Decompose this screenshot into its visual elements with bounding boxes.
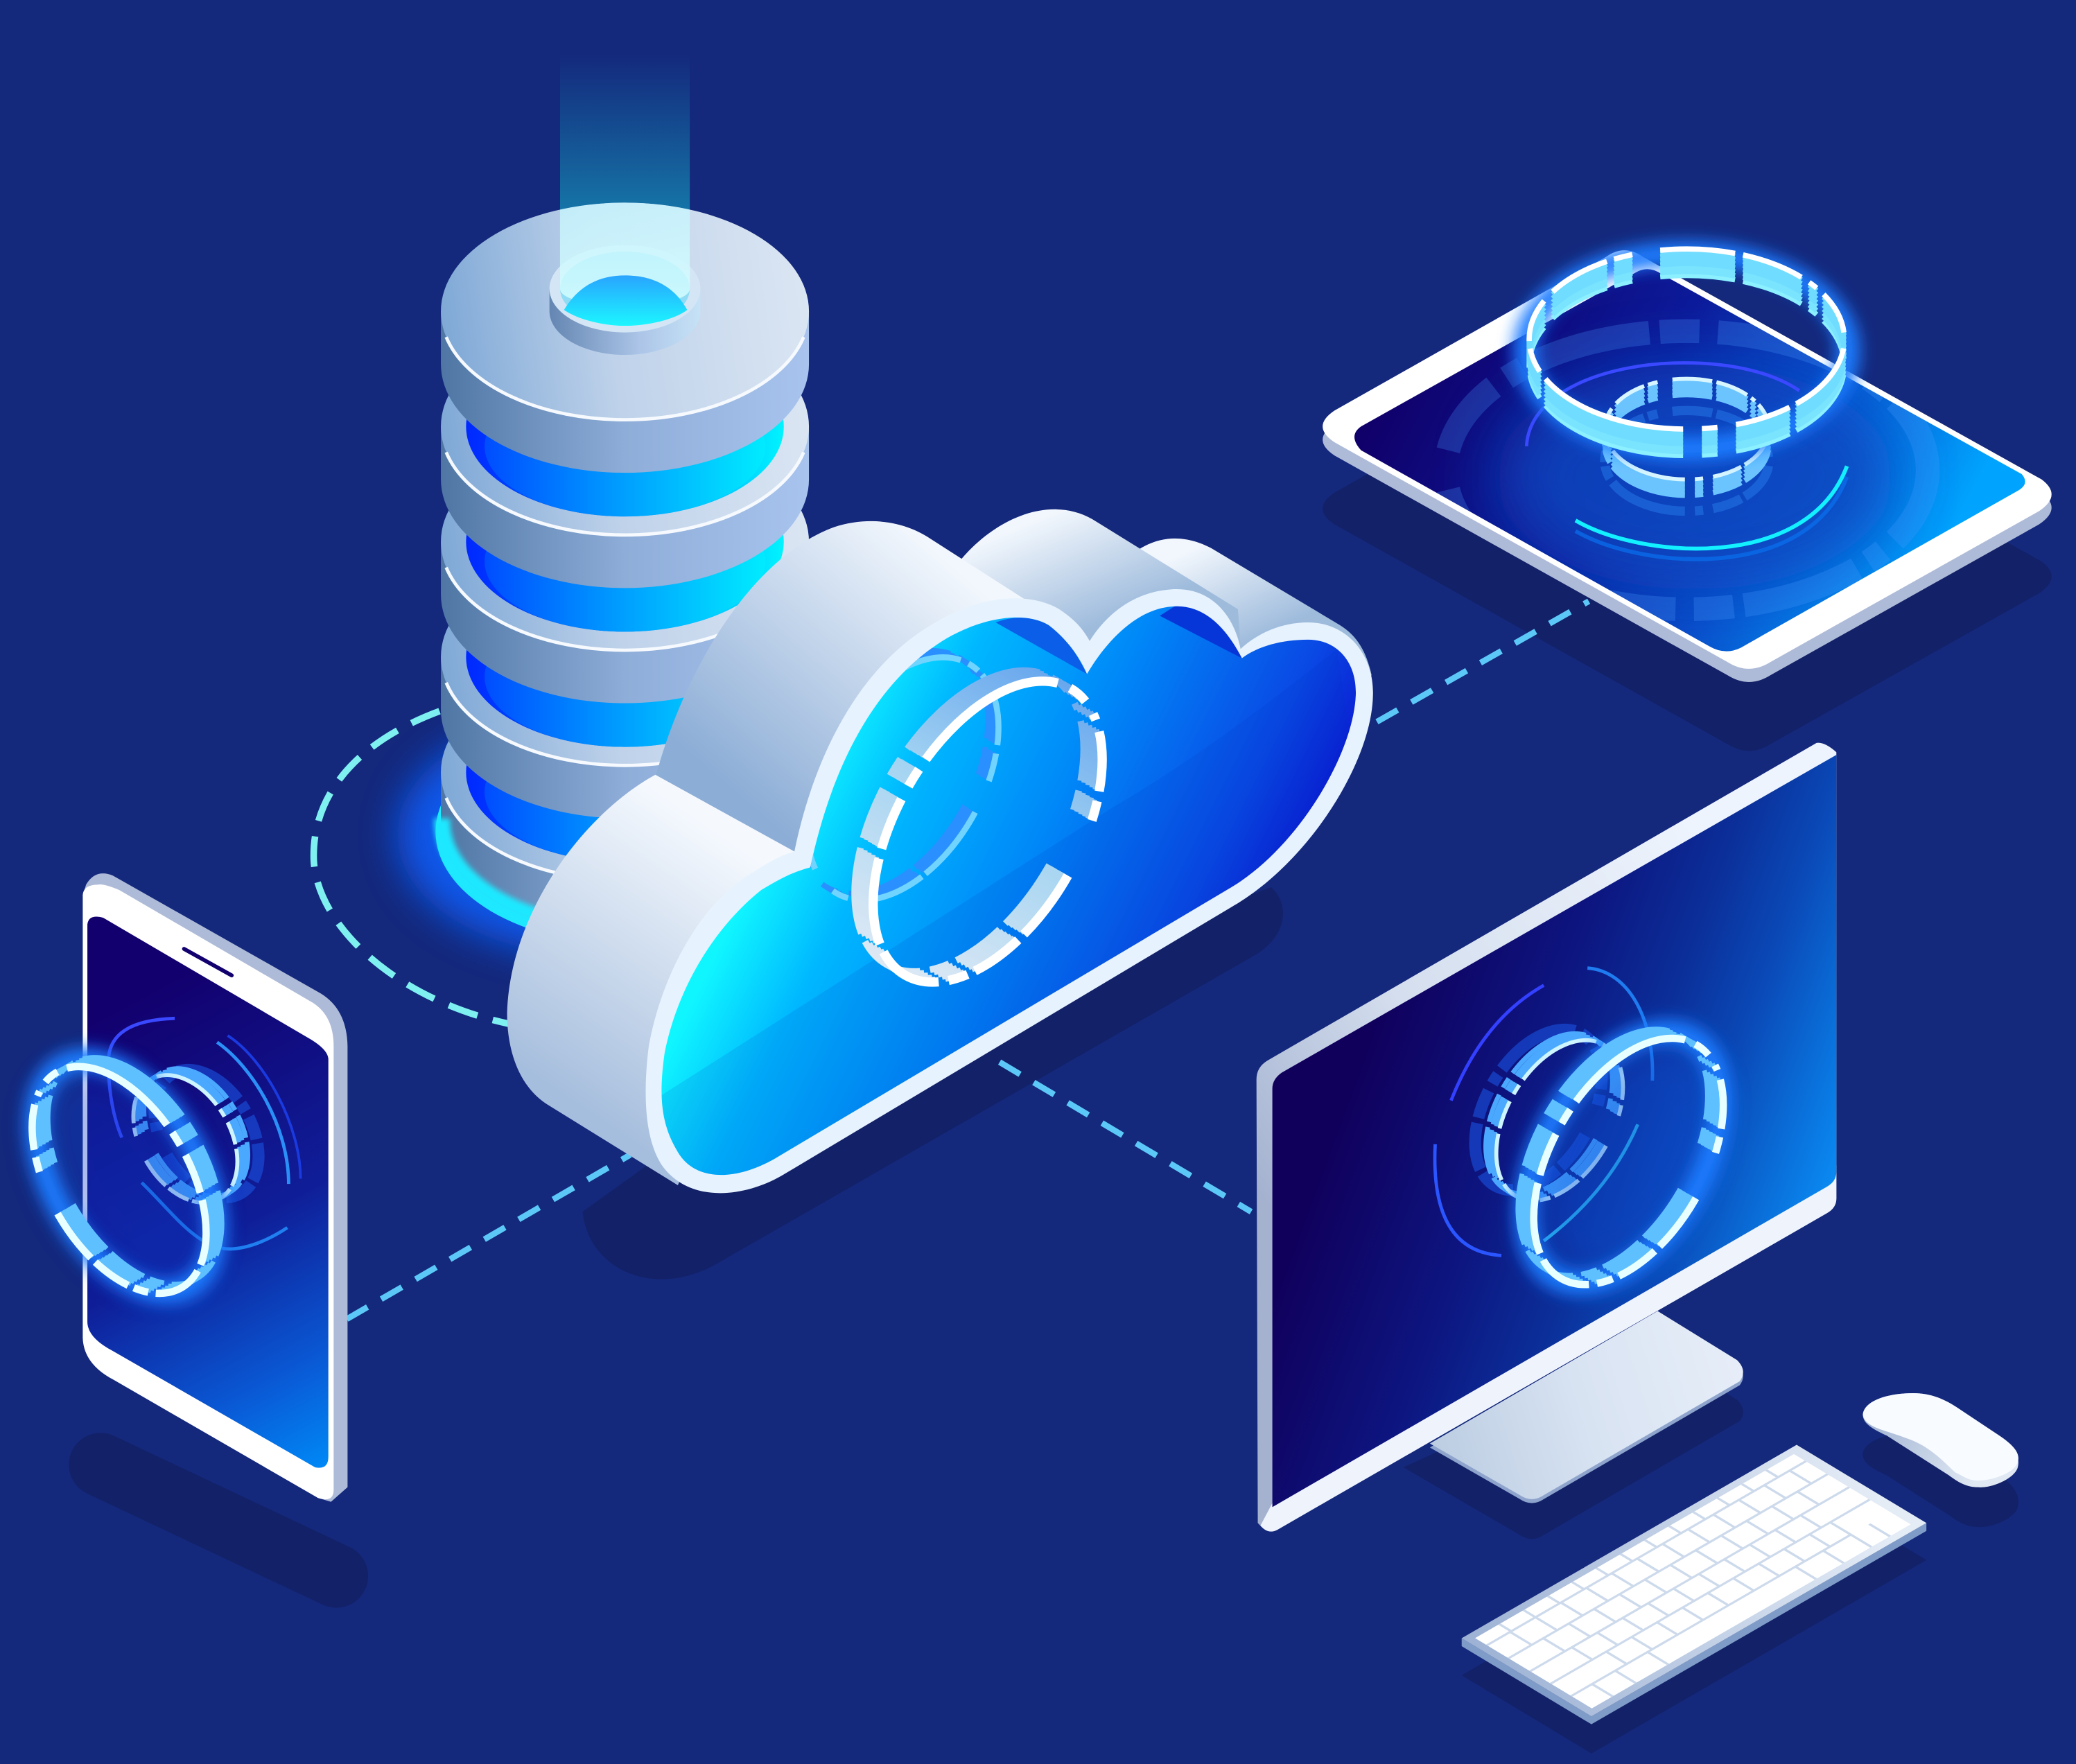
tablet side bbox=[1323, 263, 2052, 682]
database glow base bbox=[397, 713, 814, 956]
tablet small ring bbox=[1605, 378, 1769, 512]
top cap socket bbox=[550, 245, 700, 355]
monitor front ring bbox=[1479, 997, 1763, 1317]
shadow: phone bbox=[101, 1465, 336, 1576]
cloud bbox=[507, 509, 1377, 1219]
shadow: keyboard bbox=[1462, 1482, 1926, 1754]
shadow: mouse bbox=[1863, 1433, 2018, 1527]
tablet large ring bbox=[1529, 249, 1844, 455]
monitor back ring bbox=[1449, 1008, 1649, 1223]
monitor frame bbox=[1257, 743, 1836, 1531]
disc 2 bbox=[441, 318, 809, 588]
phone speaker bbox=[184, 949, 232, 975]
tablet ring glow bbox=[1525, 253, 1848, 449]
monitor bbox=[1257, 743, 1836, 1532]
dashed connector: cloud to phone bbox=[347, 1155, 630, 1319]
keyboard bbox=[1462, 1445, 1926, 1724]
light beam above disc bbox=[560, 53, 690, 225]
keyboard body bbox=[1462, 1445, 1926, 1716]
dashed orbit around database bbox=[314, 711, 508, 1024]
phone body bbox=[82, 884, 333, 1499]
phone screen bbox=[87, 917, 329, 1468]
cloud front face bbox=[661, 606, 1356, 1176]
disc 4 bbox=[441, 548, 809, 819]
tablet screen glow bbox=[1446, 331, 1928, 609]
monitor bottom bezel bbox=[1260, 1165, 1836, 1532]
cloud lobe far right bbox=[1139, 539, 1372, 689]
mouse side bbox=[1863, 1393, 2018, 1487]
shadow: monitor stand bbox=[1404, 1351, 1743, 1539]
cloud front ring bbox=[808, 632, 1149, 1021]
monitor stand bbox=[1430, 1311, 1743, 1503]
cloud lobe third bbox=[953, 509, 1242, 662]
phone bbox=[0, 873, 347, 1502]
shadow: cloud bbox=[582, 887, 1283, 1279]
mouse bbox=[1863, 1393, 2018, 1487]
database cylinder bbox=[441, 53, 809, 934]
shadow: tablet bbox=[1323, 333, 2052, 751]
phone back ring bbox=[112, 1050, 280, 1221]
phone ring glow bbox=[0, 1029, 252, 1322]
tablet screen bbox=[1354, 269, 2025, 652]
cloud back ring bbox=[810, 648, 1002, 901]
cloud lobe first bbox=[507, 775, 821, 1185]
tablet arcs bbox=[1526, 363, 1847, 559]
keyboard keys bbox=[1475, 1454, 1910, 1709]
phone front ring bbox=[0, 1028, 258, 1323]
disc 3 bbox=[441, 433, 809, 704]
disc 5 bbox=[441, 663, 809, 934]
monitor ring glow bbox=[1485, 999, 1761, 1316]
tablet bbox=[1323, 249, 2052, 682]
disc 1 top bbox=[441, 202, 809, 473]
monitor arcs bbox=[1435, 968, 1652, 1255]
phone side bbox=[82, 873, 347, 1502]
cloud front rim bbox=[646, 589, 1373, 1193]
monitor screen bbox=[1273, 755, 1836, 1507]
tablet body bbox=[1323, 250, 2052, 669]
mouse top bbox=[1863, 1393, 2018, 1481]
database cyan base arc bbox=[442, 819, 569, 925]
keyboard side bbox=[1462, 1523, 1926, 1724]
dashed connector: cloud to tablet bbox=[1377, 601, 1589, 722]
socket floor bbox=[564, 275, 687, 326]
dashed connector: cloud to monitor bbox=[1000, 1062, 1251, 1212]
phone arcs bbox=[108, 1018, 301, 1249]
light beam over disc bbox=[560, 199, 690, 306]
cloud lobe second bbox=[649, 521, 1090, 861]
